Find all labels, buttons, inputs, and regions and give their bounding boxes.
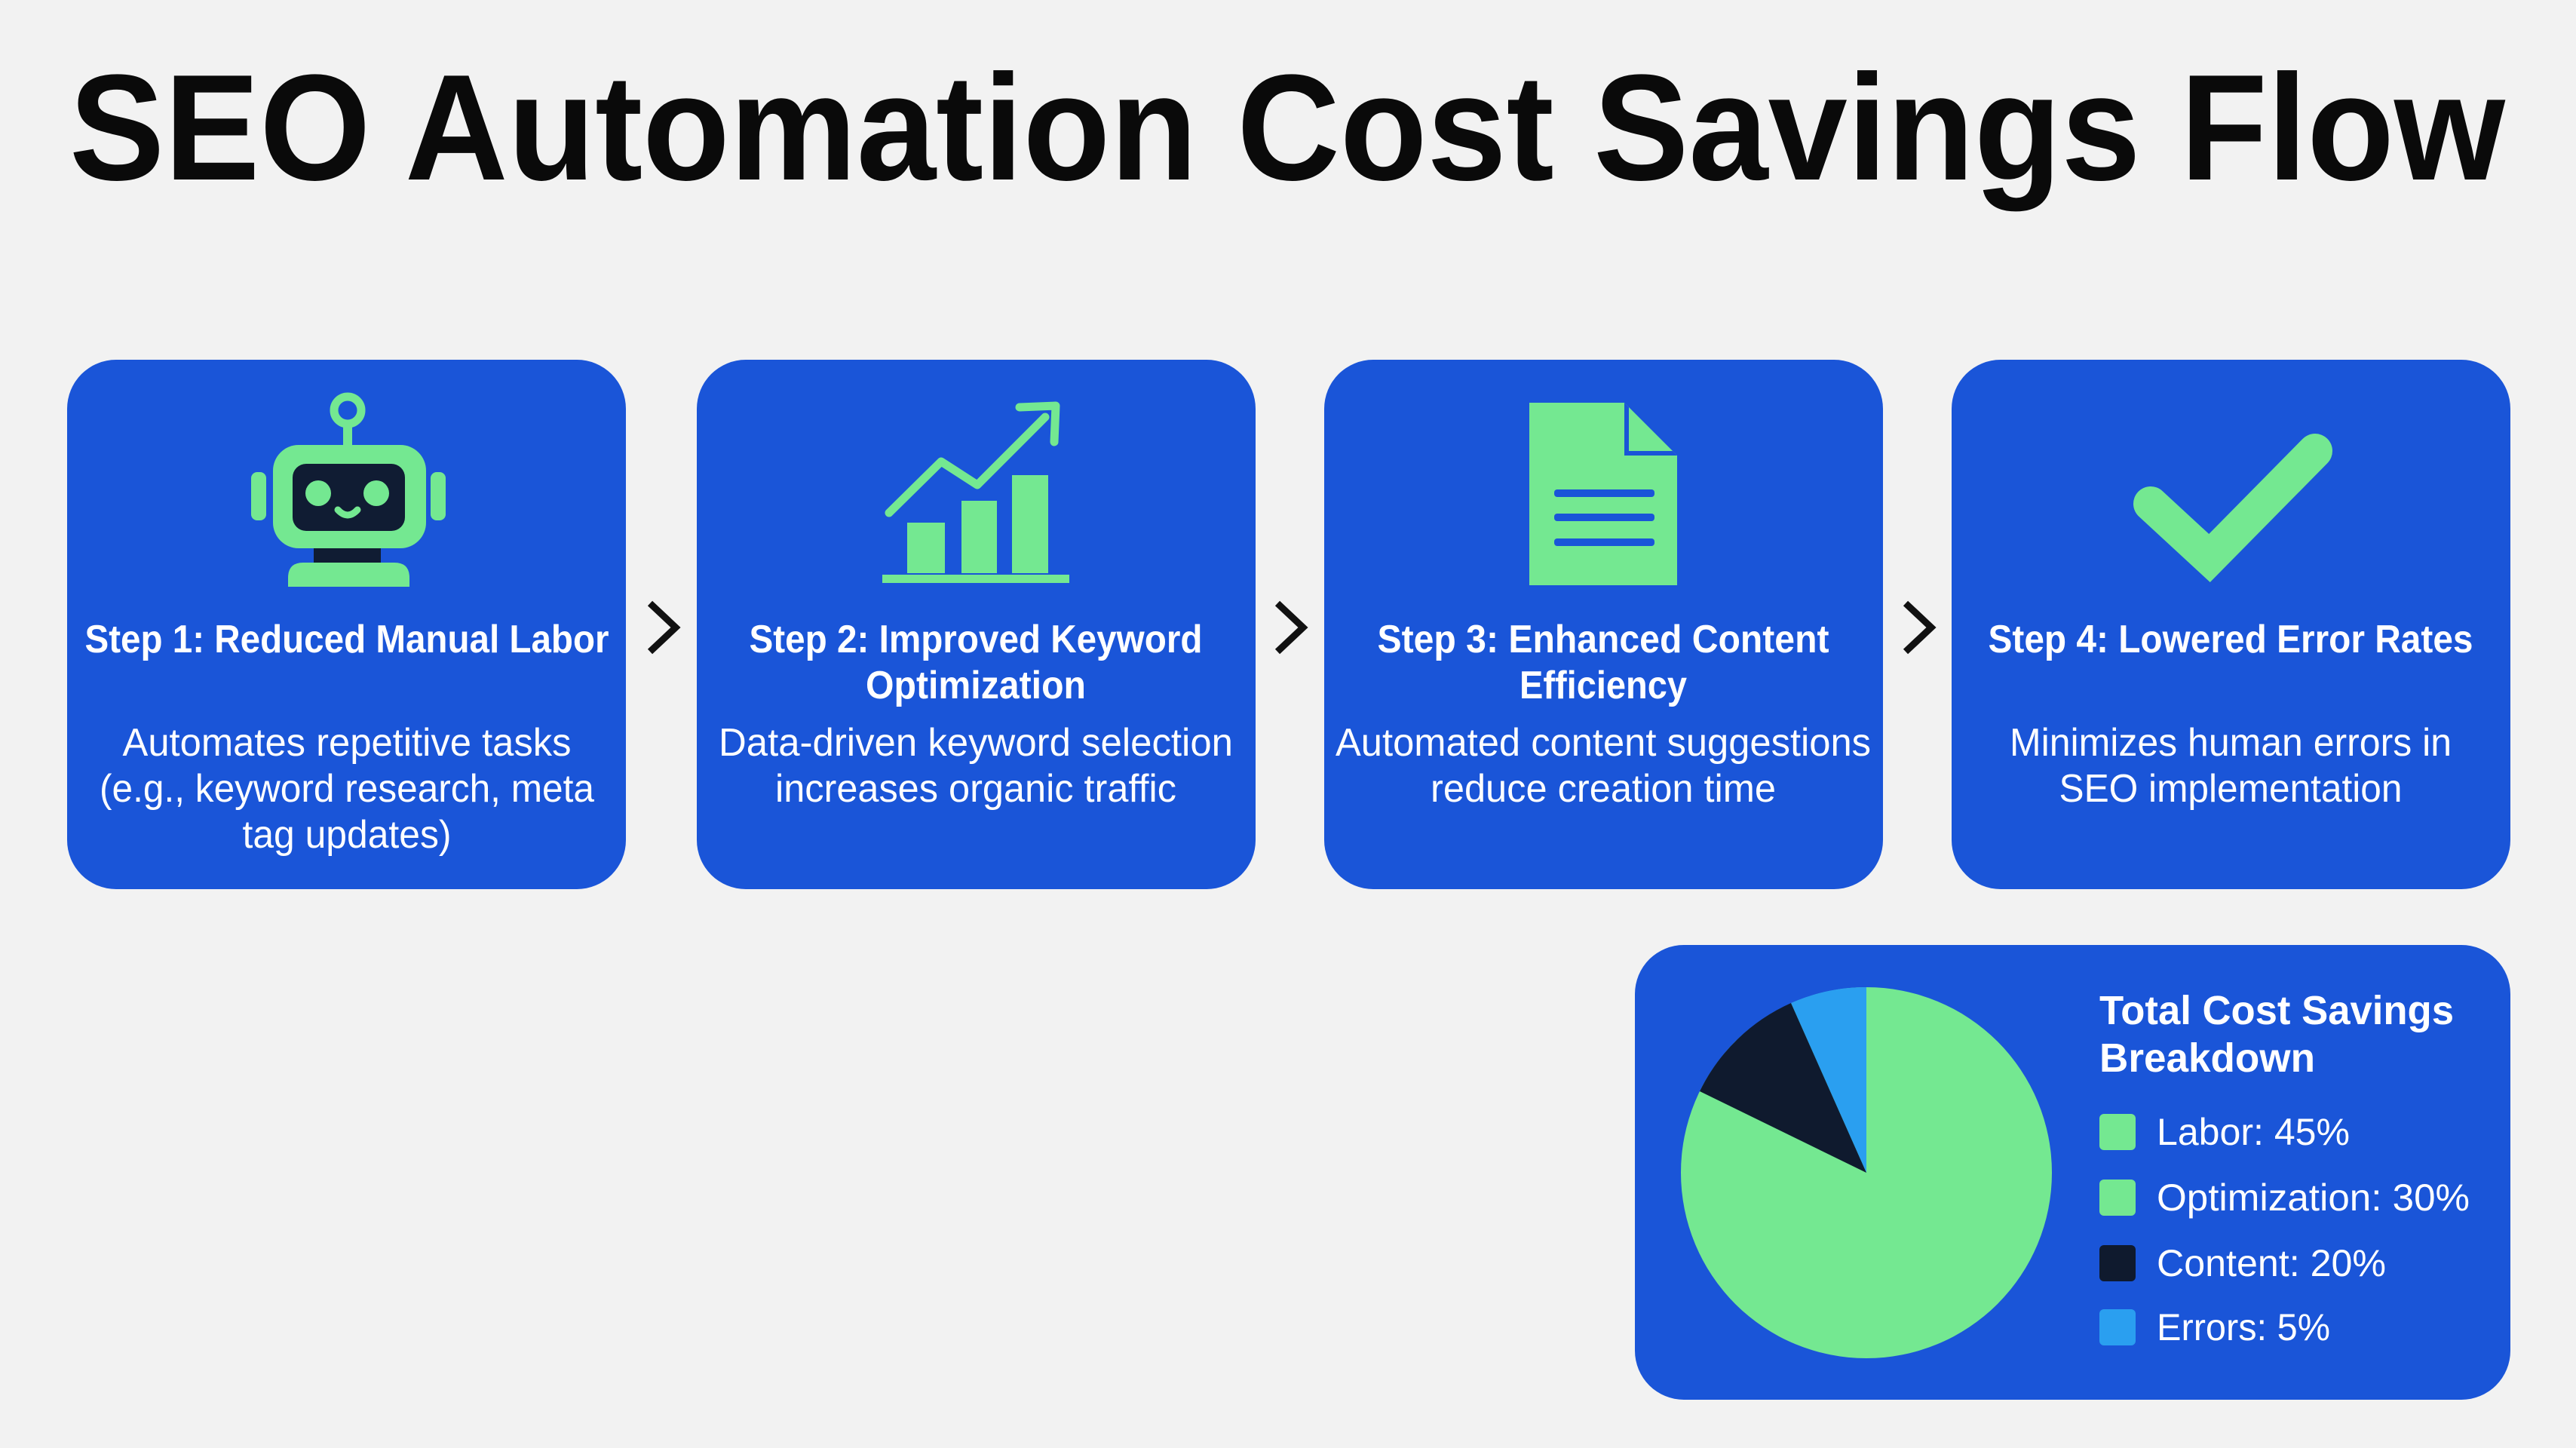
text: step 1 description: Automates repetitive tasks [122, 721, 572, 765]
text: step 3 description [1336, 721, 1871, 811]
title: SEO Automation Cost Savings Flow [69, 44, 2505, 212]
text: step 1 description [100, 721, 594, 857]
text: step 4 description: Minimizes human errors in [2010, 721, 2452, 765]
heading: step 4: Step 4: Lowered Error Rates [1988, 618, 2473, 661]
heading: step 3 [1377, 618, 1829, 707]
panel: step 1 [67, 360, 626, 889]
text: step 2 description [719, 721, 1233, 811]
icon: checkmark [2151, 451, 2315, 558]
text: step 4 description: SEO implementation [2059, 767, 2403, 811]
heading: step 3: Step 3: Enhanced Content [1377, 618, 1829, 661]
pie chart [1681, 987, 2052, 1358]
arrow 3 [1906, 603, 1931, 652]
panel: step 4 [1952, 360, 2510, 889]
panel: step 3 [1324, 360, 1883, 889]
text: step 2 description: Data-driven keyword selection [719, 721, 1233, 765]
icon: document [1529, 403, 1677, 585]
text: step 2 description: increases organic traffic [775, 767, 1176, 811]
text: step 3 description: Automated content suggestions [1336, 721, 1871, 765]
heading: step 2: Step 2: Improved Keyword [750, 618, 1202, 661]
legend: Errors: 5% [2157, 1306, 2330, 1348]
text: step 1 description: (e.g., keyword research, meta [100, 767, 594, 811]
legend title: Total Cost Savings [2099, 988, 2454, 1033]
heading: step 2 [750, 618, 1202, 707]
panel: cost savings breakdown [1635, 945, 2510, 1400]
panel: step 2 [697, 360, 1256, 889]
heading: step 2: Optimization [866, 664, 1086, 707]
arrow 1 [650, 603, 676, 652]
icon: robot [251, 397, 446, 587]
text: step 3 description: reduce creation time [1431, 767, 1776, 811]
legend [2099, 1111, 2470, 1348]
legend: Optimization: 30% [2157, 1176, 2470, 1219]
legend title [2099, 988, 2454, 1081]
heading: step 1: Step 1: Reduced Manual Labor [84, 618, 609, 661]
text: step 4 description [2010, 721, 2452, 811]
heading: step 3: Efficiency [1520, 664, 1687, 707]
legend: Labor: 45% [2157, 1111, 2350, 1153]
legend: Content: 20% [2157, 1242, 2386, 1284]
text: step 1 description: tag updates) [243, 813, 451, 857]
arrow 2 [1277, 603, 1303, 652]
legend title: Breakdown [2099, 1035, 2315, 1081]
icon: growth chart [882, 406, 1069, 583]
